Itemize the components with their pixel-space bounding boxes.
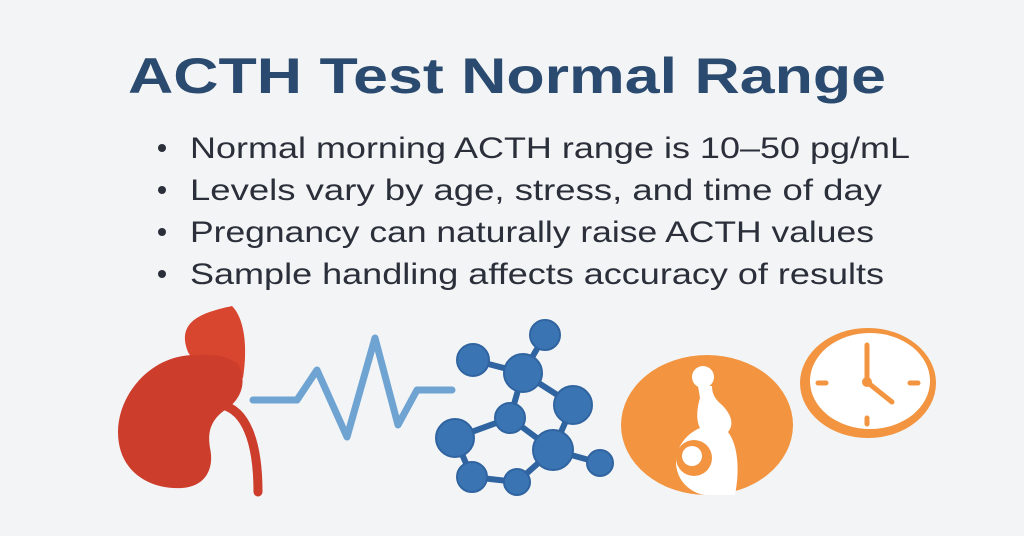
bullet list — [158, 132, 910, 291]
bullet list: Sample handling affects accuracy of results — [190, 258, 884, 291]
icon: kidney with adrenal gland — [118, 306, 258, 492]
icon: clock — [800, 328, 936, 438]
icon: pulse wave — [253, 338, 452, 437]
title: ACTH Test Normal Range — [128, 48, 886, 104]
icon: molecule — [436, 320, 613, 495]
bullet list: Pregnancy can naturally raise ACTH values — [190, 216, 874, 249]
bullet list: Levels vary by age, stress, and time of day — [190, 174, 882, 207]
icon: pregnancy circle — [621, 355, 793, 495]
bullet list: Normal morning ACTH range is 10–50 pg/mL — [190, 132, 910, 165]
